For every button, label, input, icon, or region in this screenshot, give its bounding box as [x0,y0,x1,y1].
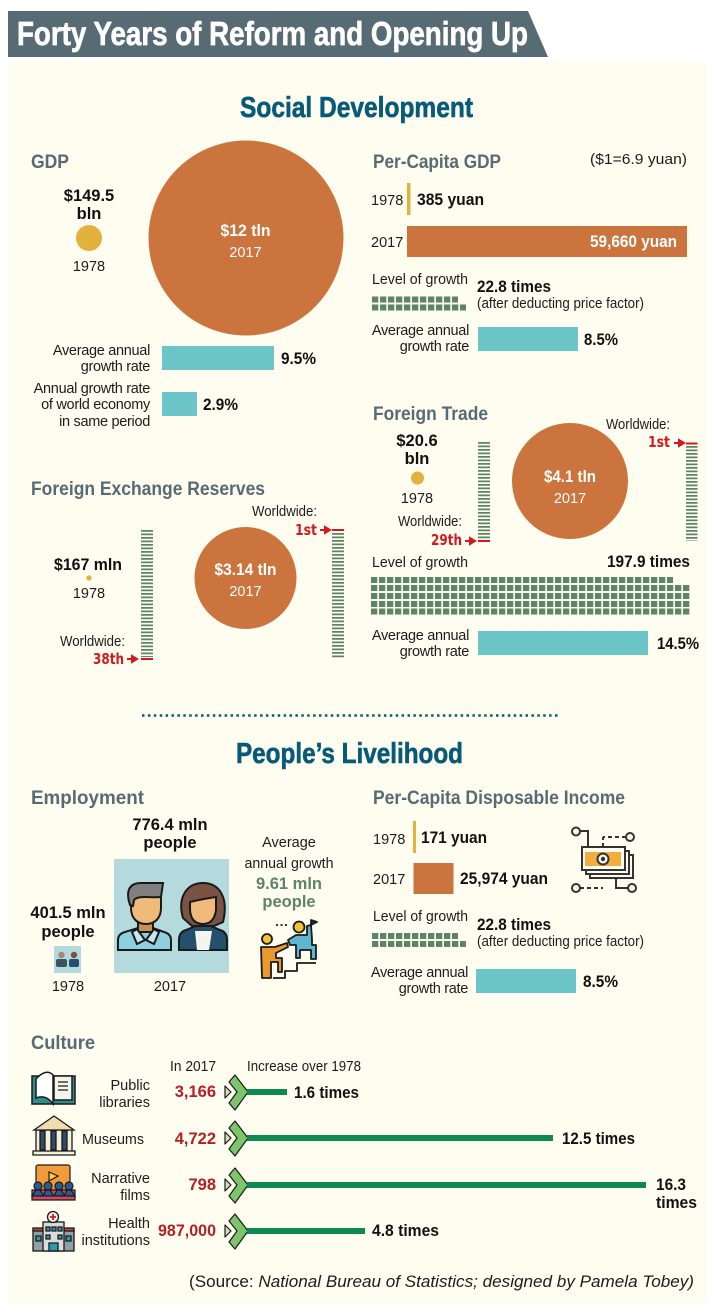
rank 1978: 38th [93,650,124,668]
1978 value: $20.6 [396,432,438,450]
row: Narrative films: times [656,1194,697,1212]
average annual growth rate bar: growth rate [400,644,469,660]
row: Health institutions [33,1212,439,1251]
column label: Increase over 1978: Increase over 1978 [247,1059,361,1075]
GDP 1978 value: bln [77,205,101,223]
GDP growth rate bar: growth rate [81,359,150,375]
row: Narrative films [32,1165,697,1212]
GDP 1978 label: 1978 [73,259,105,275]
heading: GDP: GDP [31,152,69,173]
average annual growth rate bar: growth rate [399,981,468,997]
2017 circle: 2017 [554,491,586,507]
level of growth: Level of growth [373,909,468,925]
GDP growth rate bar: Average annual [53,343,150,359]
icon: man [118,883,171,950]
level of growth: Level of growth [372,555,468,571]
average annual growth rate bar: growth rate [400,339,469,355]
rank 1978: Worldwide: [398,514,462,530]
rank 2017: Worldwide: [252,504,317,520]
row: Museums: 4,722 [175,1130,216,1148]
1978 label: 1978 [73,586,105,602]
heading: Social Development: Social Development [240,92,473,124]
GDP growth rate bar: 9.5% [281,350,316,368]
row: Narrative films: films [120,1188,150,1204]
rank 1978 [398,442,490,549]
heading: People's Livelihood: People’s Livelihood [236,738,463,770]
1978 people square [54,946,81,973]
icon: cinema audience [32,1165,75,1200]
average annual growth rate bar [371,965,618,997]
average annual growth rate bar [372,323,618,355]
heading: Employment: Employment [31,788,145,809]
heading: Per-Capita Disposable Income: Per-Capita Disposable Income [373,788,625,809]
2017 value: people [143,834,197,852]
source note: (Source: National Bureau of Statistics; designed by Pamela Tobey) [189,1272,694,1291]
GDP growth rate bar [53,343,316,375]
panel: Culture [31,1033,697,1251]
row: Museums [33,1116,635,1156]
panel: Foreign Trade [371,404,699,660]
rank 2017: 1st [295,521,317,539]
GDP 1978 value: $149.5 [64,187,114,205]
level of growth [371,553,690,612]
panel: Per-Capita Disposable Income [371,788,644,997]
1978 bar: 1978 [373,832,405,848]
2017 bar: 2017 [371,235,403,251]
panel: Foreign Exchange Reserves [31,479,344,668]
world economy growth rate bar: in same period [59,414,150,430]
icon: woman [179,883,227,950]
average annual growth rate bar: Average annual [372,628,469,644]
row: Narrative films: 16.3 [656,1176,686,1194]
average annual growth rate bar: 14.5% [657,635,699,653]
level of growth: (after deducting price factor) [477,934,644,950]
chevron [225,1121,248,1156]
icon: book [32,1072,75,1104]
row: Museums: Museums [82,1132,144,1148]
row: Health institutions: 987,000 [158,1222,216,1240]
annual growth text: people [262,893,316,911]
row: Public libraries: 1.6 times [294,1084,359,1102]
rank 2017 [606,417,698,541]
2017 value: 776.4 mln [132,816,208,834]
1978 circle [411,472,424,484]
2017 people square [114,859,229,973]
2017 circle [512,423,628,539]
heading: Per-Capita GDP: Per-Capita GDP [373,152,501,173]
average annual growth rate bar: 8.5% [583,973,618,991]
GDP 2017 circle: $12 tln [220,222,270,240]
icon: hospital [33,1212,74,1251]
level of growth: 197.9 times [607,553,690,571]
GDP 2017 circle: 2017 [229,245,262,261]
2017 bar [371,226,687,257]
heading: Foreign Trade: Foreign Trade [373,404,488,425]
world economy growth rate bar: Annual growth rate [34,381,150,397]
row: Public libraries: 3,166 [175,1083,216,1101]
2017 label: 2017 [154,979,186,995]
rank 1978 [60,530,153,668]
1978 bar: 1978 [371,193,403,209]
heading: Culture: Culture [31,1033,95,1054]
chevron [225,1075,248,1110]
level of growth [372,272,644,312]
row: Health institutions: Health [108,1216,150,1232]
1978 bar: 385 yuan [417,191,484,209]
heading: Foreign Exchange Reserves: Foreign Exchange Reserves [31,479,265,500]
level of growth [372,909,644,950]
rank 2017: Worldwide: [606,417,670,433]
1978 bar [371,183,484,215]
annual growth text [244,835,334,911]
row: Health institutions: 4.8 times [372,1222,439,1240]
row: Health institutions: institutions [81,1233,150,1249]
average annual growth rate bar: Average annual [372,323,469,339]
level of growth: 22.8 times [477,278,551,296]
1978 dot [86,575,92,581]
1978 value: 401.5 mln [30,904,106,922]
2017 bar: 2017 [373,872,405,888]
panel: Employment [30,788,334,995]
exchange rate note: ($1=6.9 yuan) [590,152,687,168]
2017 circle: $3.14 tln [214,561,276,579]
rank 1978: Worldwide: [60,634,125,650]
annual growth text: annual growth [244,856,334,872]
1978 value: $167 mln [54,556,122,574]
chevron [225,1214,248,1249]
1978 value: bln [405,450,429,468]
row: Museums: 12.5 times [562,1130,635,1148]
row: Public libraries [32,1072,359,1111]
2017 circle: $4.1 tln [544,468,596,486]
chevron [225,1168,248,1203]
2017 bar: 25,974 yuan [460,870,548,888]
1978 label: 1978 [52,979,84,995]
2017 bar: 59,660 yuan [590,233,677,251]
average annual growth rate bar: 8.5% [584,331,618,349]
title banner: Forty Years of Reform and Opening Up [17,15,528,52]
level of growth: (after deducting price factor) [477,296,644,312]
row: Narrative films: Narrative [91,1171,150,1187]
2017 circle [194,527,296,629]
1978 value: people [41,923,95,941]
1978 bar: 171 yuan [421,829,487,847]
rank 2017 [252,504,344,659]
column label: In 2017: In 2017 [170,1059,216,1075]
annual growth text: Average [262,835,316,851]
average annual growth rate bar: Average annual [371,965,468,981]
world economy growth rate bar: of world economy [41,397,151,413]
2017 bar [373,863,548,894]
panel: Per-Capita GDP [371,152,687,355]
rank 1978: 29th [431,531,462,549]
panel: GDP [31,140,344,430]
world economy growth rate bar: 2.9% [203,396,238,414]
rank 2017: 1st [648,433,670,451]
row: Narrative films: 798 [188,1176,216,1194]
world economy growth rate bar [34,381,238,430]
icon: museum [33,1116,75,1155]
row: Public libraries: libraries [99,1095,150,1111]
annual growth text: 9.61 mln [256,875,322,893]
GDP 2017 circle [148,140,344,336]
icon: money circuit [572,828,636,892]
1978 bar [373,821,487,853]
2017 circle: 2017 [229,584,262,600]
icon: climbing figures [261,920,317,978]
row: Public libraries: Public [110,1078,150,1094]
level of growth: 22.8 times [477,916,551,934]
average annual growth rate bar [372,628,699,660]
GDP 1978 circle [76,225,102,251]
1978 label: 1978 [401,491,433,507]
level of growth: Level of growth [372,272,468,288]
